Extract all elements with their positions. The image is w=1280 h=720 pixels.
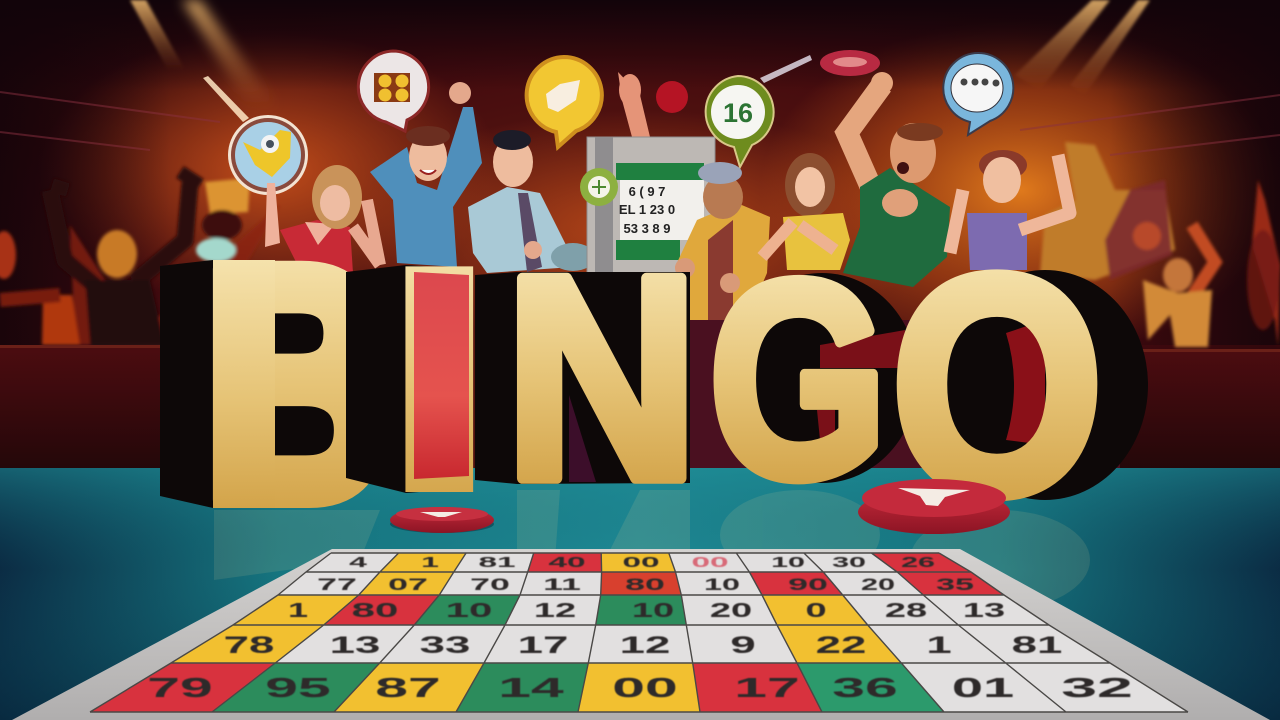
man in blue sweater — [370, 82, 482, 267]
board numbers: 9 — [730, 631, 756, 658]
light beams — [130, 0, 1150, 122]
man in cap and yellow jacket — [675, 162, 770, 320]
coloured cells — [90, 553, 1004, 712]
board numbers: 1 — [421, 555, 439, 571]
board numbers: 81 — [478, 555, 516, 570]
red chip left — [390, 507, 494, 533]
board numbers: 22 — [816, 631, 866, 658]
red chip right — [858, 479, 1010, 534]
board numbers: 17 — [734, 671, 800, 703]
bubble icon: number 16: 16 — [723, 98, 753, 128]
letter B: B — [202, 197, 390, 571]
board numbers: 10 — [446, 599, 492, 621]
board numbers: 77 — [317, 575, 357, 594]
board numbers: 13 — [330, 631, 380, 658]
board numbers — [147, 554, 1133, 703]
letter N: N — [504, 216, 699, 540]
board numbers: 40 — [548, 555, 586, 570]
bingo machine: 53 3 8 9 — [624, 221, 670, 236]
board numbers: 81 — [1012, 631, 1062, 658]
bubble icon: gold hand — [527, 57, 602, 147]
white grid base — [90, 553, 1188, 712]
bubble icon: number 16 — [706, 76, 774, 167]
bubble icon: chat — [943, 53, 1013, 135]
board numbers: 12 — [534, 600, 576, 622]
board numbers: 10 — [704, 576, 740, 594]
board numbers: 79 — [147, 671, 213, 703]
BINGO 3D title — [160, 195, 1148, 571]
woman in red top — [265, 165, 380, 273]
board numbers: 28 — [885, 600, 927, 622]
board numbers: 80 — [352, 599, 398, 621]
board numbers: 4 — [349, 555, 367, 571]
board numbers: 35 — [936, 575, 974, 594]
board numbers: 26 — [901, 554, 935, 571]
bubble icon: symbols — [358, 51, 429, 131]
board numbers: 32 — [1061, 672, 1133, 703]
board numbers: 10 — [771, 554, 805, 571]
board numbers: 00 — [622, 555, 660, 570]
letter reflections — [214, 490, 1090, 610]
board numbers: 1 — [288, 600, 308, 622]
letter G: G — [709, 224, 888, 536]
board numbers: 33 — [420, 631, 470, 658]
board numbers: 01 — [952, 672, 1014, 703]
board numbers: 70 — [470, 575, 510, 594]
board numbers: 80 — [625, 575, 665, 594]
board numbers: 20 — [710, 600, 752, 622]
stage wall — [0, 320, 1280, 475]
board numbers: 00 — [691, 555, 729, 570]
board numbers: 20 — [861, 576, 895, 594]
left crowd — [0, 172, 280, 345]
bingo board — [12, 549, 1270, 720]
bingo machine: 6 ( 9 7 — [629, 184, 665, 199]
board numbers: 14 — [498, 671, 564, 703]
man in green t-shirt — [843, 72, 950, 287]
board numbers: 12 — [620, 631, 670, 658]
board numbers: 11 — [543, 575, 581, 594]
flying red disc — [820, 50, 880, 76]
board numbers: 90 — [788, 575, 828, 594]
board numbers: 95 — [265, 671, 331, 703]
board numbers: 00 — [612, 671, 678, 703]
woman in purple top — [950, 150, 1070, 270]
red dot — [656, 81, 688, 113]
board numbers: 30 — [832, 554, 866, 571]
man in shirt and tie — [468, 130, 595, 273]
board numbers: 87 — [375, 671, 441, 703]
board numbers: 10 — [632, 600, 674, 622]
floor — [0, 468, 1280, 720]
bubble icon: bird coin — [228, 115, 308, 195]
board numbers: 0 — [805, 600, 827, 622]
board numbers: 07 — [388, 575, 428, 594]
raised hand — [618, 72, 650, 137]
right crowd — [1040, 142, 1280, 347]
bingo machine — [580, 137, 715, 277]
letter O: O — [891, 212, 1103, 558]
board numbers: 13 — [963, 600, 1005, 622]
letter I: I — [374, 195, 505, 562]
board paper — [12, 549, 1270, 720]
bingo machine: EL 1 23 0 — [619, 202, 675, 217]
board numbers: 17 — [518, 631, 568, 658]
woman in yellow top — [762, 153, 850, 270]
board numbers: 36 — [832, 671, 898, 703]
board numbers: 78 — [224, 631, 274, 658]
board numbers: 1 — [926, 631, 952, 658]
